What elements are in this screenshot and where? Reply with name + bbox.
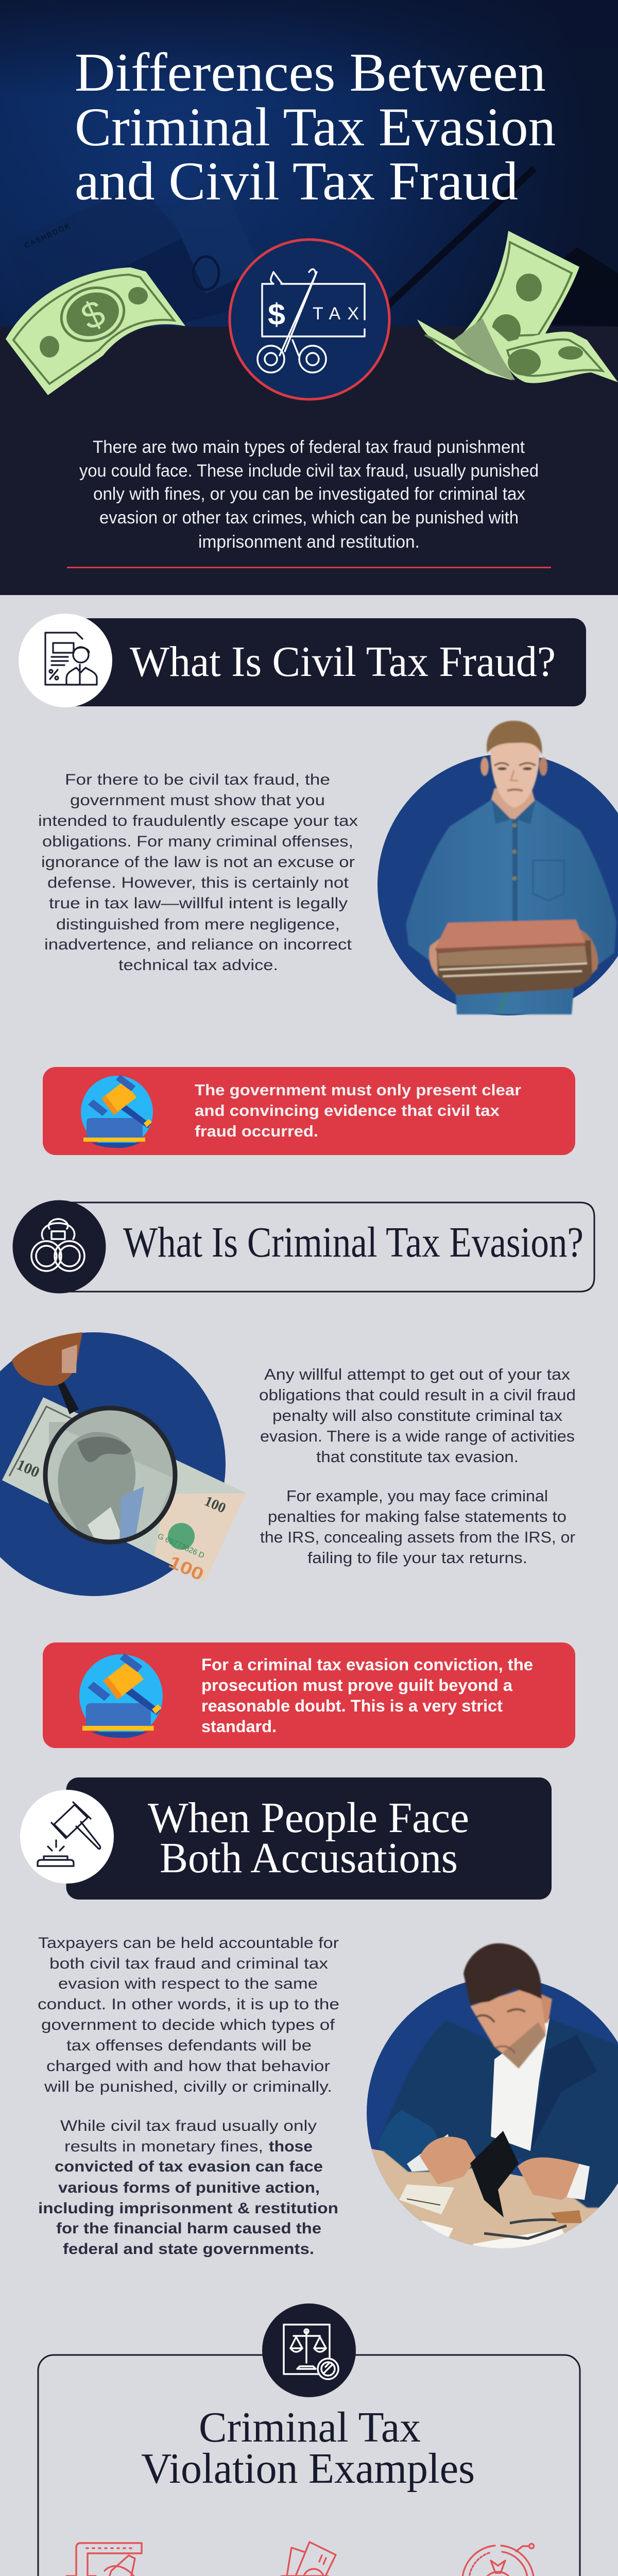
body text: distinguished from mere negligence,: [56, 916, 340, 933]
intro text: only with fines, or you can be investigated for criminal tax: [93, 484, 525, 504]
icon: tax scissors badge: TAX: [313, 304, 359, 324]
photo: magnifying glass over hundred dollar bill: 100: [166, 1552, 207, 1585]
heading: criminal tax violation examples: [141, 2403, 475, 2493]
body text: inadvertence, and reliance on incorrect: [44, 936, 352, 953]
icon: tax scissors badge: [230, 240, 389, 399]
body text: including imprisonment & restitution: [38, 2200, 338, 2217]
photo: magnifying glass over hundred dollar bill: 100: [202, 1493, 228, 1516]
intro text: [79, 437, 539, 552]
panel: criminal tax violation examples: [37, 2303, 581, 2576]
body text: the IRS, concealing assets from the IRS, or: [260, 1528, 575, 1546]
panel: hero: [0, 0, 618, 595]
body text: Any willful attempt to get out of your tax: [264, 1365, 571, 1383]
body text: obligations that could result in a civil fraud: [259, 1386, 576, 1404]
callout: beyond a reasonable doubt: standard.: [201, 1717, 277, 1736]
callout: beyond a reasonable doubt: For a criminal tax evasion conviction, the: [201, 1655, 533, 1674]
body text: penalty will also constitute criminal tax: [272, 1406, 563, 1425]
photo: magnifying glass over hundred dollar bill: 100: [14, 1456, 42, 1481]
title: Criminal Tax Evasion: [75, 97, 556, 157]
heading: what is civil tax fraud: What Is Civil Tax Fraud?: [130, 638, 556, 686]
icon: money bill left: [6, 267, 185, 395]
callout: beyond a reasonable doubt: prosecution must prove guilt beyond a: [201, 1676, 512, 1694]
photo: magnifying glass over hundred dollar bill: G 69773826 D: [156, 1532, 206, 1560]
icon: gavel: [81, 1075, 153, 1148]
hero photo background: CASHBOOK: [23, 221, 72, 250]
item: underreporting income: [248, 2542, 363, 2576]
body text: While civil tax fraud usually only: [60, 2117, 317, 2134]
title: [75, 42, 556, 211]
body text: various forms of punitive action,: [58, 2179, 320, 2196]
body text: ignorance of the law is not an excuse or: [41, 854, 355, 871]
body text: penalties for making false statements to: [268, 1507, 566, 1526]
body text: tax offenses defendants will be: [66, 2037, 312, 2054]
icon: gavel outline: [38, 1802, 100, 1866]
body text: evasion with respect to the same: [58, 1975, 318, 1992]
photo: magnifying glass over hundred dollar bill: [0, 1332, 246, 1596]
callout: beyond a reasonable doubt: reasonable doubt. This is a very strict: [201, 1697, 503, 1715]
body text: evasion. There is a wide range of activities: [260, 1427, 575, 1445]
icon: scales of justice: [262, 2303, 356, 2397]
panel: when people face both accusations: [20, 1777, 618, 2258]
heading: criminal tax violation examples: Criminal Tax: [199, 2403, 421, 2451]
item: failure to file tax returns: [60, 2543, 160, 2576]
icon: gavel: [79, 1653, 163, 1738]
title: and Civil Tax Fraud: [75, 151, 518, 211]
intro text: imprisonment and restitution.: [198, 532, 420, 552]
heading: when people face both accusations: When People Face: [148, 1794, 469, 1842]
callout: clear and convincing evidence: and convincing evidence that civil tax: [195, 1101, 500, 1120]
body text: those: [269, 2138, 313, 2155]
body text: both civil tax fraud and criminal tax: [49, 1955, 328, 1972]
callout: clear and convincing evidence: [43, 1067, 575, 1155]
icon: tax scissors badge: $: [268, 298, 285, 331]
callout: beyond a reasonable doubt: [43, 1642, 575, 1748]
heading: what is criminal tax evasion: [12, 1200, 594, 1293]
callout: clear and convincing evidence: fraud occurred.: [195, 1122, 318, 1140]
body text: [259, 1365, 576, 1567]
body text: convicted of tax evasion can face: [55, 2158, 323, 2175]
body text: obligations. For many criminal offenses,: [42, 833, 353, 850]
body text: defense. However, this is certainly not: [47, 874, 349, 891]
body text: results in monetary fines,: [64, 2138, 263, 2155]
panel: what is civil tax fraud: [19, 614, 618, 1155]
body text: true in tax law—willful intent is legally: [49, 895, 348, 912]
body text: [38, 1935, 339, 2258]
heading: when people face both accusations: [20, 1777, 552, 1900]
heading: criminal tax violation examples: Violation Examples: [141, 2445, 475, 2493]
heading: when people face both accusations: Both Accusations: [160, 1834, 458, 1882]
callout: clear and convincing evidence: The government must only present clear: [195, 1081, 521, 1099]
photo: man holding files: [377, 721, 618, 1015]
title: Differences Between: [75, 42, 546, 103]
item: failure to disclose foreign assets: [430, 2544, 566, 2576]
intro text: evasion or other tax crimes, which can be punished with: [99, 508, 519, 528]
body text: For there to be civil tax fraud, the: [65, 771, 330, 788]
panel: what is criminal tax evasion: [0, 1200, 595, 1748]
icon: tax document and accountant: [45, 633, 97, 685]
body text: federal and state governments.: [63, 2241, 314, 2258]
body text: failing to file your tax returns.: [307, 1549, 527, 1567]
body text: technical tax advice.: [118, 957, 278, 974]
intro text: There are two main types of federal tax fraud punishment: [93, 437, 525, 457]
hero photo background: [0, 0, 618, 595]
body text: will be punished, civilly or criminally.: [44, 2078, 332, 2095]
icon: handcuffs: [31, 1219, 84, 1271]
hand and handle: [12, 1332, 82, 1414]
icon: money bills right: [417, 231, 618, 383]
heading: what is civil tax fraud: [19, 614, 586, 707]
body text: that constitute tax evasion.: [316, 1448, 519, 1466]
body text: Taxpayers can be held accountable for: [38, 1935, 339, 1952]
body text: For example, you may face criminal: [286, 1487, 548, 1505]
intro text: you could face. These include civil tax fraud, usually punished: [79, 461, 539, 481]
body text: conduct. In other words, it is up to the: [38, 1996, 339, 2013]
body text: government must show that you: [70, 792, 325, 809]
body text: government to decide which types of: [41, 2016, 335, 2033]
body text: for the financial harm caused the: [56, 2220, 321, 2237]
body text: [38, 771, 358, 974]
magnifier lens: [41, 1408, 175, 1551]
icon: money bill left: $: [75, 292, 111, 338]
body text: intended to fraudulently escape your tax: [38, 812, 358, 829]
photo: man looking into empty wallet: [360, 1943, 618, 2257]
body text: charged with and how that behavior: [46, 2058, 330, 2075]
